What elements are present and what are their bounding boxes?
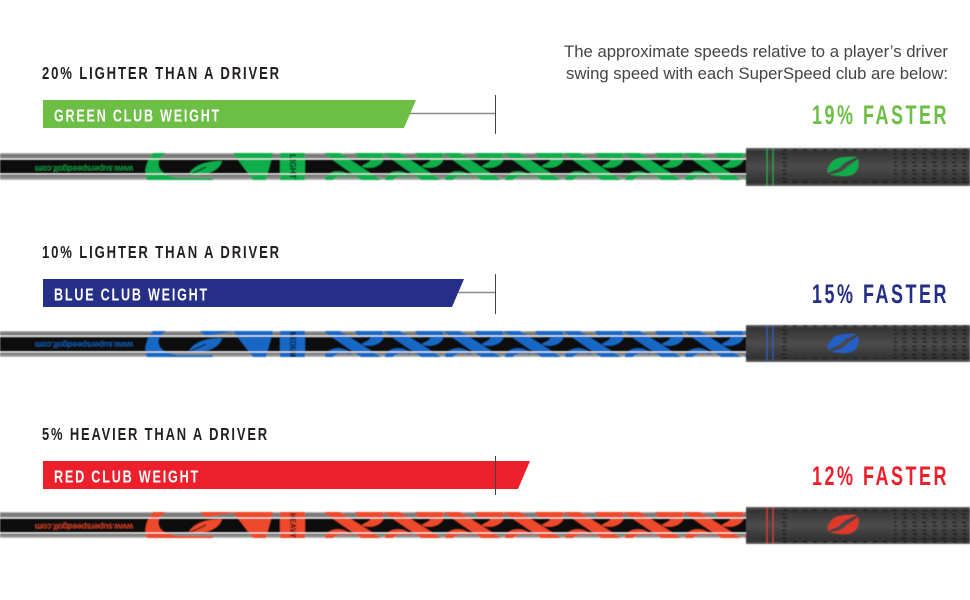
heading: green club: 20% LIGHTER THAN A DRIVER — [42, 63, 281, 83]
red driver reference marker — [494, 456, 496, 495]
intro text — [564, 43, 948, 83]
red shaft: www.superspeedgolf.com — [35, 522, 134, 532]
intro text: The approximate speeds relative to a player’s driver — [564, 43, 948, 61]
red shaft and grip — [0, 507, 970, 544]
blue shaft — [0, 331, 750, 357]
blue shaft and grip — [0, 325, 970, 362]
green weight bar — [43, 100, 416, 128]
blue grip — [746, 325, 970, 362]
green shaft — [0, 153, 750, 180]
heading: red club: 5% HEAVIER THAN A DRIVER — [42, 424, 269, 444]
blue driver reference marker — [458, 274, 496, 314]
green shaft: www.superspeedgolf.com — [35, 164, 134, 174]
blue shaft: MEDIUM — [288, 332, 297, 357]
red weight bar: RED CLUB WEIGHT — [54, 466, 200, 486]
blue weight bar: BLUE CLUB WEIGHT — [54, 284, 209, 304]
green shaft: LIGHT — [288, 154, 297, 179]
blue shaft: www.superspeedgolf.com — [35, 340, 134, 350]
heading: blue club: 10% LIGHTER THAN A DRIVER — [42, 242, 281, 262]
green driver reference marker — [410, 95, 496, 134]
green weight bar: GREEN CLUB WEIGHT — [54, 106, 221, 126]
red shaft: HEAVY — [288, 513, 297, 539]
green shaft and grip — [0, 148, 970, 186]
red grip — [746, 507, 970, 544]
green grip — [746, 148, 970, 186]
red shaft — [0, 512, 750, 539]
intro text: swing speed with each SuperSpeed club are below: — [566, 65, 948, 83]
red weight bar — [43, 461, 530, 489]
blue weight bar — [43, 279, 464, 307]
